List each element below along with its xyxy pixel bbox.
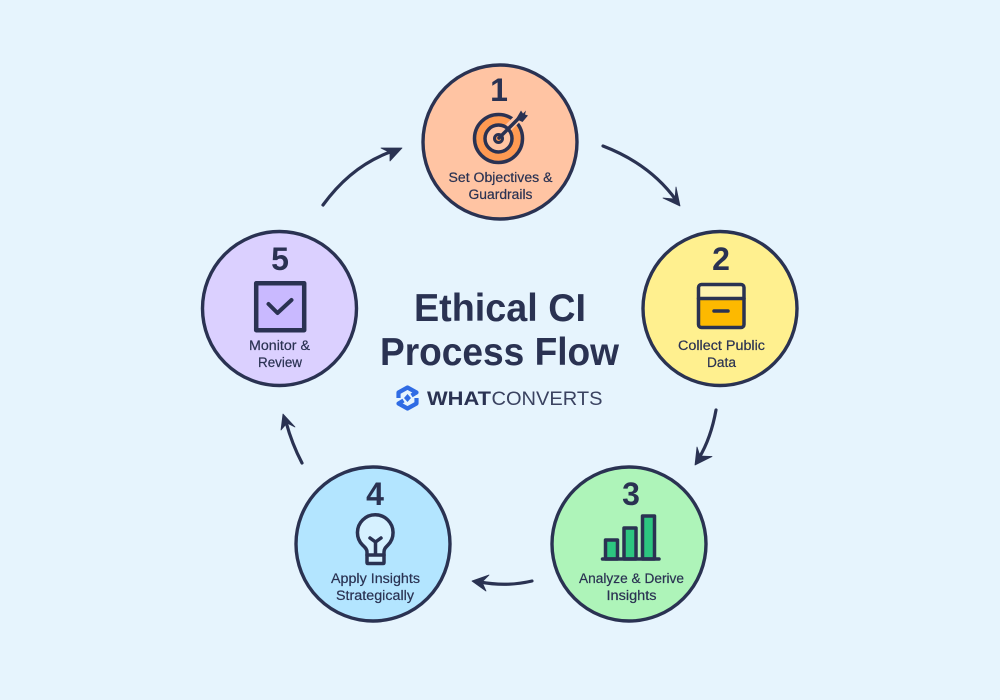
step number 2: 2	[712, 241, 730, 277]
label: Collect Public Data: Collect Public	[678, 338, 765, 353]
icon: archive box	[698, 284, 744, 328]
icon: target with arrow	[474, 109, 528, 162]
title: Ethical CI	[414, 287, 586, 330]
panel: step 1 set objectives	[423, 65, 577, 219]
step number 5: 5	[271, 241, 289, 277]
label: Apply Insights Strategically	[331, 571, 420, 603]
step number 3: 3	[622, 476, 640, 512]
wordmark: CONVERTS	[492, 389, 602, 410]
label: Collect Public Data: Data	[707, 355, 736, 370]
label: Analyze & Derive Insights: Insights	[606, 588, 657, 603]
label: Apply Insights Strategically: Apply Insights	[331, 571, 420, 586]
icon: bar chart	[602, 516, 659, 559]
panel: step 5 monitor and review	[202, 232, 356, 386]
arrow: step 3 to step 4	[472, 575, 532, 591]
label: Set Objectives & Guardrails	[448, 170, 552, 202]
panel: step 3 analyze and derive insights	[552, 467, 706, 621]
arrow: step 2 to step 3	[695, 410, 716, 465]
label: Monitor & Review	[249, 338, 310, 370]
wordmark: WHAT	[427, 389, 491, 410]
arrow: step 5 to step 1	[323, 148, 402, 205]
step number 4: 4	[366, 476, 384, 512]
title	[380, 287, 620, 374]
panel: step 2 collect public data	[643, 232, 797, 386]
logo: WhatConverts	[398, 388, 602, 410]
icon: light bulb	[357, 515, 393, 564]
icon: logo hexagon	[398, 388, 416, 408]
wordmark	[427, 389, 602, 410]
label: Monitor & Review: Monitor &	[249, 338, 310, 353]
label: Set Objectives & Guardrails: Guardrails	[468, 187, 533, 202]
title: Process Flow	[380, 331, 620, 374]
label: Collect Public Data	[678, 338, 765, 370]
arrow: step 1 to step 2	[603, 146, 680, 206]
label: Analyze & Derive Insights	[579, 571, 684, 603]
label: Analyze & Derive Insights: Analyze & Derive	[579, 571, 684, 586]
label: Apply Insights Strategically: Strategically	[336, 588, 414, 603]
label: Set Objectives & Guardrails: Set Objectives &	[448, 170, 552, 185]
panel: step 4 apply insights strategically	[296, 467, 450, 621]
arrow: step 4 to step 5	[281, 414, 302, 463]
label: Monitor & Review: Review	[258, 355, 302, 370]
step number 1: 1	[490, 72, 508, 108]
icon: checkbox	[256, 283, 304, 330]
